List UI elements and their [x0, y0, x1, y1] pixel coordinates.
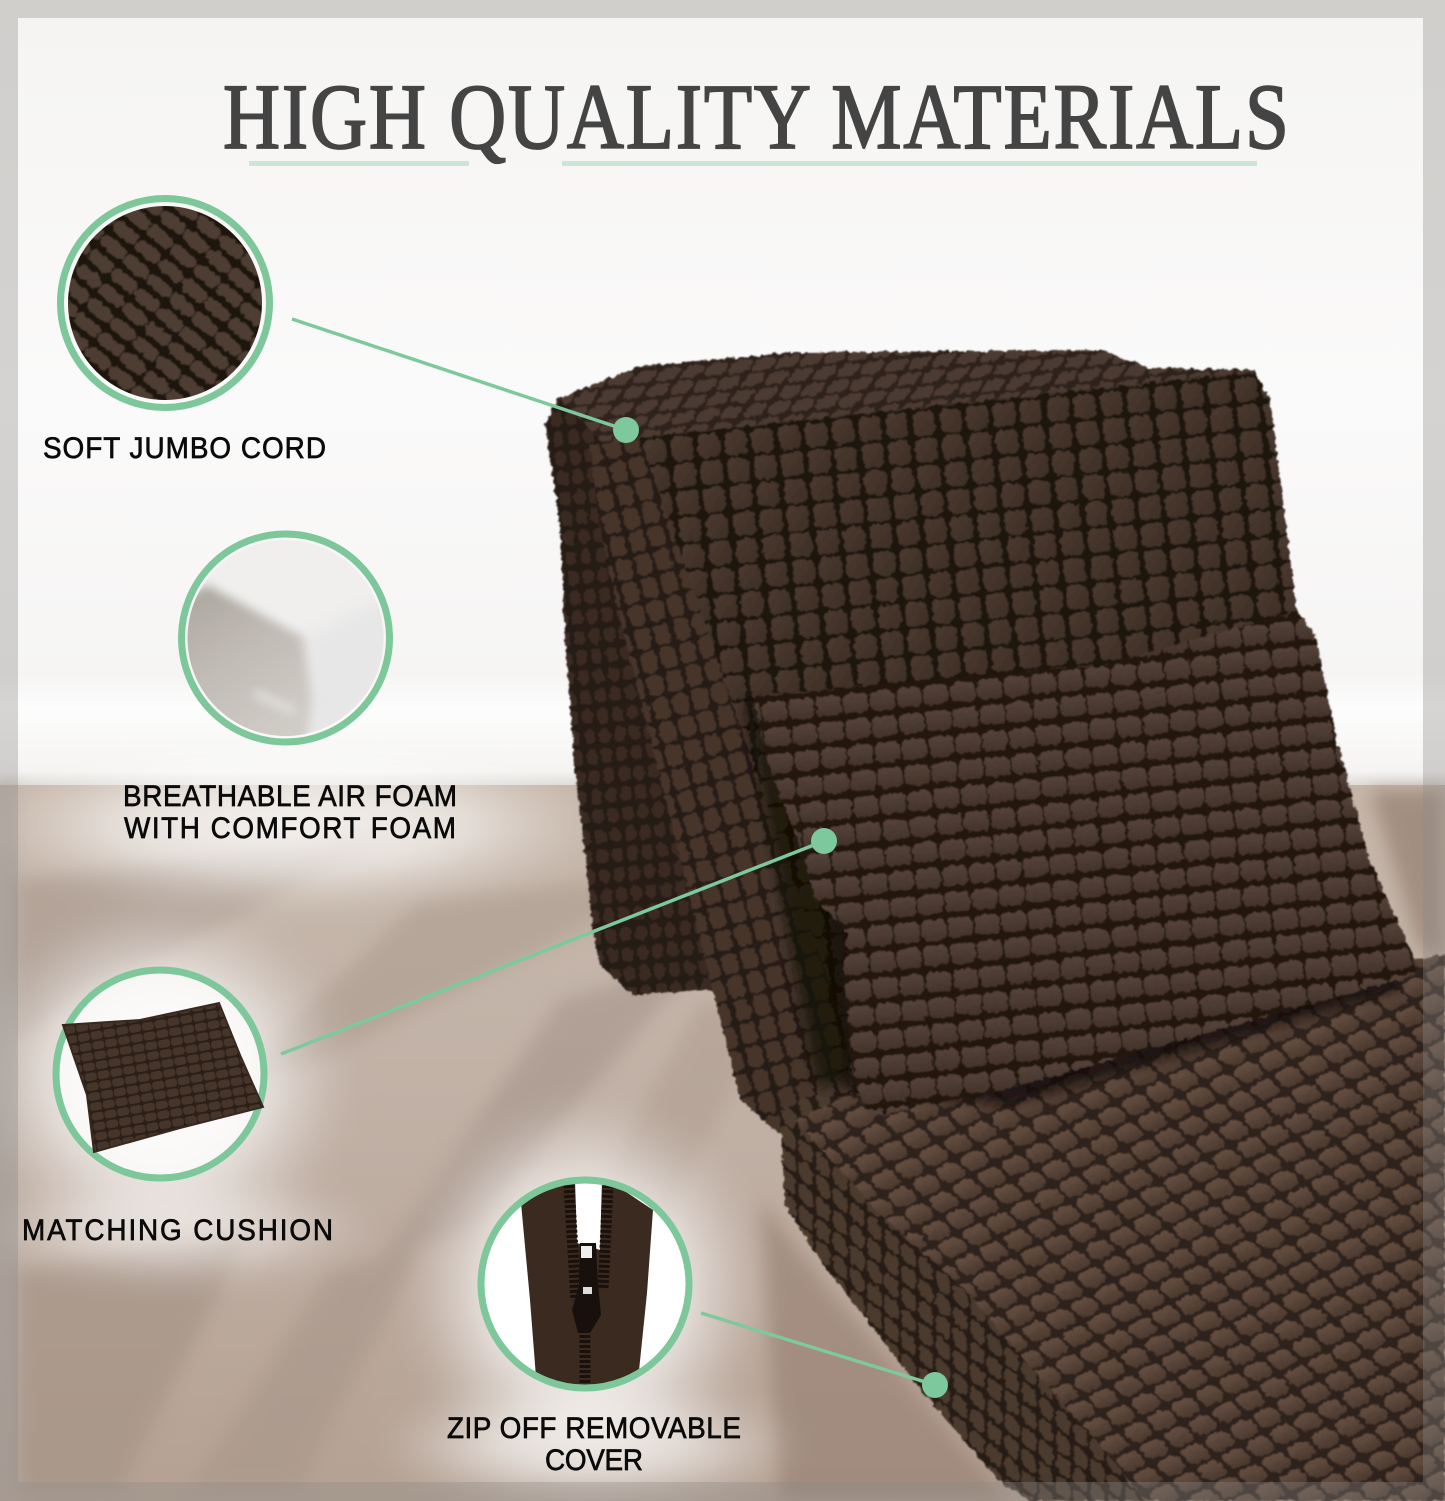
photo: zipper	[484, 1180, 686, 1390]
photo: cushion	[63, 1003, 263, 1152]
green ring	[56, 970, 264, 1178]
callout: soft jumbo cord	[43, 198, 639, 465]
photo: fabric swatch	[68, 206, 262, 400]
green ring	[481, 1180, 689, 1388]
label: ZIP OFF REMOVABLE	[447, 1412, 741, 1445]
chair rear cushion	[545, 395, 730, 995]
leader line with dot	[281, 828, 837, 1054]
cushion on chair	[753, 611, 1419, 1117]
label	[123, 780, 457, 845]
title	[223, 65, 1289, 168]
chair back front face	[640, 371, 1400, 1100]
crevice shadow behind cushion	[745, 700, 870, 1085]
chair top face	[560, 350, 1258, 445]
callout: breathable foam	[123, 530, 457, 845]
title text: HIGH QUALITY MATERIALS	[223, 65, 1289, 168]
chair back left edge	[590, 438, 880, 1133]
photo: foam block	[188, 540, 384, 736]
folded chair	[545, 350, 1445, 1501]
green ring	[182, 534, 390, 742]
title underline left	[249, 161, 469, 166]
leader line with dot	[701, 1313, 948, 1398]
soft glow behind labels	[0, 740, 807, 1501]
chair seat side	[780, 1095, 1145, 1501]
label: WITH COMFORT FOAM	[124, 812, 456, 845]
title underline right	[562, 161, 1257, 166]
wood floor	[0, 785, 1445, 1501]
callout: zip off cover	[447, 1180, 948, 1477]
cushion shadow	[790, 700, 1400, 1105]
leader line with dot	[292, 319, 639, 443]
label: BREATHABLE AIR FOAM	[123, 780, 457, 813]
green ring	[60, 198, 270, 408]
label: MATCHING CUSHION	[22, 1214, 333, 1247]
callout: matching cushion	[22, 828, 837, 1247]
chair seat top	[795, 954, 1445, 1501]
label: SOFT JUMBO CORD	[43, 432, 326, 465]
photo backdrop	[59, 973, 261, 1175]
label	[447, 1412, 741, 1477]
label: COVER	[545, 1444, 643, 1477]
floor planks	[0, 785, 1445, 1501]
wall	[0, 0, 1445, 787]
